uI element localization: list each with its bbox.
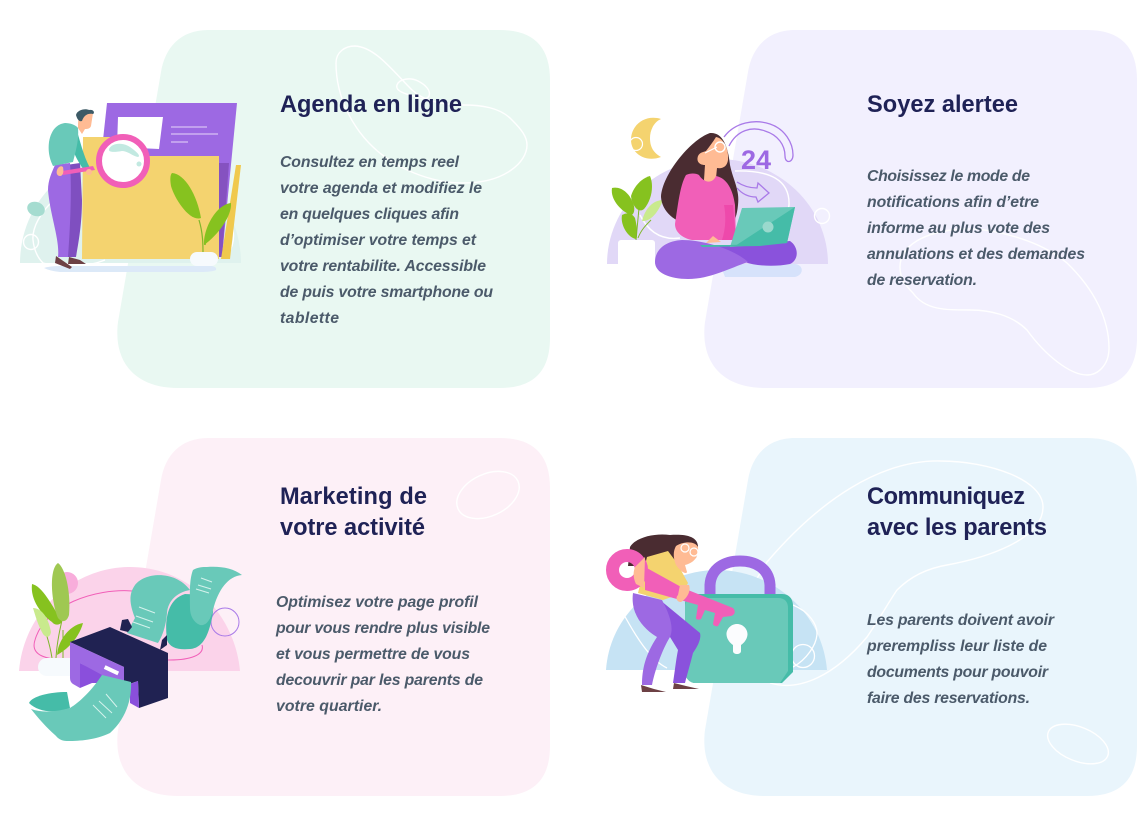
- woman: [655, 133, 797, 279]
- body text: Les parents doivent avoir: [867, 612, 1055, 629]
- heading: avec les parents: [867, 515, 1047, 541]
- laptop: [700, 207, 795, 247]
- panel: communiquez avec les parents: [606, 438, 1137, 796]
- plant: [32, 563, 88, 676]
- padlock: [685, 561, 793, 683]
- panel background: light blue: [704, 438, 1137, 796]
- panel: agenda en ligne: [20, 30, 550, 388]
- floor shadow: [44, 266, 216, 272]
- decorative loop curve: [900, 229, 1109, 375]
- arrow: [737, 182, 769, 202]
- body text: [280, 154, 493, 327]
- body text: et vous permettre de vous: [276, 646, 470, 663]
- illustration: printer: [19, 563, 242, 741]
- panel background: pink: [117, 438, 550, 796]
- body text: votre agenda et modifiez le: [280, 180, 482, 197]
- body text: documents pour pouvoir: [867, 664, 1049, 681]
- body text: Optimisez votre page profil: [276, 594, 479, 611]
- body text: Consultez en temps reel: [280, 154, 460, 171]
- body text: votre quartier.: [276, 698, 382, 715]
- purple document: [103, 103, 237, 257]
- panel: marketing de votre activite: [19, 438, 550, 796]
- illustration: man inspecting folder with magnifier: [20, 103, 241, 272]
- decorative ellipse: [1042, 716, 1114, 772]
- body text: informe au plus vote des: [867, 220, 1050, 237]
- background semicircle: [19, 567, 240, 671]
- heading: votre activité: [280, 515, 425, 541]
- plant and pot: [612, 176, 663, 268]
- body text: [275, 594, 490, 715]
- printer body: [70, 619, 168, 708]
- decorative loop curve: [336, 46, 527, 183]
- illustration: woman carrying key to padlock: [606, 534, 827, 692]
- heading: [280, 484, 427, 541]
- decorative loop curve: [738, 461, 1043, 685]
- panel background: lavender: [704, 30, 1137, 388]
- paper upper: [166, 594, 213, 649]
- body text: de reservation.: [867, 272, 977, 289]
- heading: [867, 484, 1047, 541]
- paper lower: [29, 692, 70, 711]
- panel background: green: [117, 30, 550, 388]
- floor shadow: [720, 264, 802, 277]
- heading: Soyez alertee: [867, 92, 1018, 118]
- plant: [170, 173, 231, 266]
- 24 label: 24: [741, 145, 771, 175]
- moon: [631, 118, 661, 159]
- yellow folder: [221, 165, 241, 259]
- background semicircle: [606, 570, 827, 670]
- body text: Choisissez le mode de: [867, 168, 1030, 185]
- body text: annulations et des demandes: [867, 246, 1085, 263]
- body text: pour vous rendre plus visible: [275, 620, 490, 637]
- heading: Communiquez: [867, 484, 1025, 510]
- clock arrow arc: [724, 122, 793, 162]
- body text: votre rentabilite. Accessible: [280, 258, 486, 275]
- man: [48, 109, 95, 269]
- decorative ellipse: [449, 462, 527, 528]
- panel: soyez alertee: [607, 30, 1137, 388]
- body text: notifications afin d’etre: [867, 194, 1039, 211]
- body text: en quelques cliques afin: [280, 206, 459, 223]
- background semicircle: [607, 159, 828, 264]
- background semicircle: [20, 153, 241, 263]
- heading: Agenda en ligne: [280, 92, 462, 118]
- key: [612, 556, 735, 626]
- body text: prerempliss leur liste de: [866, 638, 1047, 655]
- magnifier: [99, 137, 147, 185]
- body text: d’optimiser votre temps et: [280, 232, 477, 249]
- body text: [867, 168, 1085, 289]
- illustration: woman with laptop, 24h notifications: [607, 118, 830, 279]
- body text: decouvrir par les parents de: [276, 672, 483, 689]
- woman: [628, 534, 700, 692]
- white paper: [117, 117, 163, 149]
- heading: Marketing de: [280, 484, 427, 510]
- body text: [866, 612, 1055, 707]
- body text: de puis votre smartphone ou: [280, 284, 493, 301]
- body text: faire des reservations.: [867, 690, 1030, 707]
- body text: tablette: [280, 310, 339, 327]
